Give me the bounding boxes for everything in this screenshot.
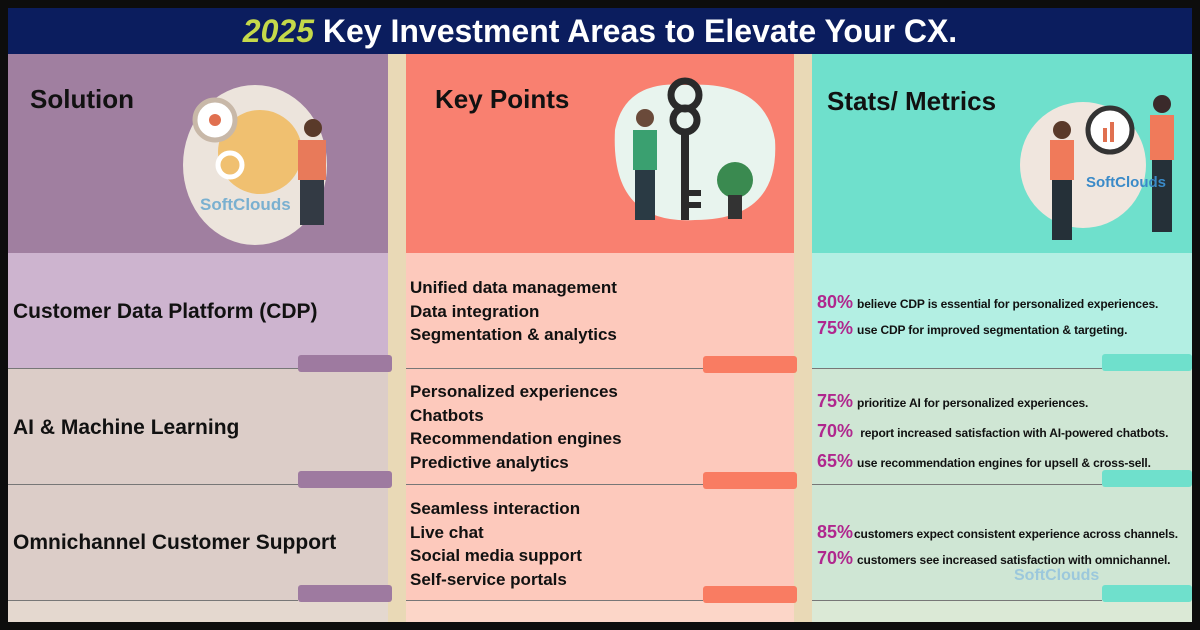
key points row 2 (410, 382, 622, 472)
row: Omnichannel: Omnichannel Customer Support (13, 531, 336, 554)
panel: solution column (8, 54, 388, 622)
stats row 2 (817, 391, 1168, 471)
panel: key points column (406, 54, 794, 622)
stats row 2: 70% report increased satisfaction with AI-powered chatbots. (817, 421, 1168, 441)
key points row 3: Seamless interaction (410, 499, 580, 518)
illustration: analysts with magnifier (1020, 95, 1174, 240)
illustration: lightbulb person: SoftClouds (200, 195, 291, 214)
tabs col3 (812, 354, 1192, 602)
illustration: analysts with magnifier: SoftClouds (1086, 174, 1166, 191)
heading: Key Points: Key Points (435, 84, 569, 114)
watermark logo: SoftClouds (1014, 567, 1099, 584)
heading: Solution: Solution (30, 84, 134, 114)
row: CDP: Customer Data Platform (CDP) (13, 300, 318, 323)
stats row 2: 65% use recommendation engines for upsell & cross-sell. (817, 451, 1151, 471)
key points row 3: Live chat (410, 522, 484, 542)
key points row 1: Unified data management (410, 278, 617, 297)
key points row 1: Segmentation & analytics (410, 325, 617, 344)
key points row 2: Predictive analytics (410, 452, 569, 472)
stats row 2: 75% prioritize AI for personalized experiences. (817, 391, 1088, 411)
row: AI: AI & Machine Learning (13, 416, 239, 439)
panel: stats column (812, 54, 1192, 622)
stats row 1: 80% believe CDP is essential for personalized experiences. (817, 292, 1158, 312)
key points row 3 (410, 499, 582, 588)
key points row 2: Personalized experiences (410, 382, 618, 401)
key points row 1 (410, 278, 617, 344)
tabs col1 (8, 355, 392, 602)
title bar (8, 8, 1192, 54)
key points row 2: Recommendation engines (410, 429, 622, 448)
stats row 3: 70% customers see increased satisfaction with omnichannel. (817, 548, 1170, 568)
illustration: key and person (614, 78, 776, 220)
stats row 3 (817, 522, 1178, 568)
stats row 1 (817, 292, 1158, 338)
key points row 3: Social media support (410, 546, 582, 565)
key points row 1: Data integration (410, 302, 539, 320)
key points row 2: Chatbots (410, 406, 484, 424)
key points row 3: Self-service portals (410, 570, 567, 588)
tabs col2 (406, 356, 797, 603)
stats row 3: 85%customers expect consistent experience across channels. (817, 522, 1178, 542)
title bar: 2025 Key Investment Areas to Elevate Your CX. (243, 13, 957, 49)
stats row 1: 75% use CDP for improved segmentation & targeting. (817, 318, 1127, 338)
heading: Stats/ Metrics: Stats/ Metrics (827, 86, 996, 116)
illustration: lightbulb person (183, 85, 327, 245)
gutter backgrounds (388, 54, 406, 622)
